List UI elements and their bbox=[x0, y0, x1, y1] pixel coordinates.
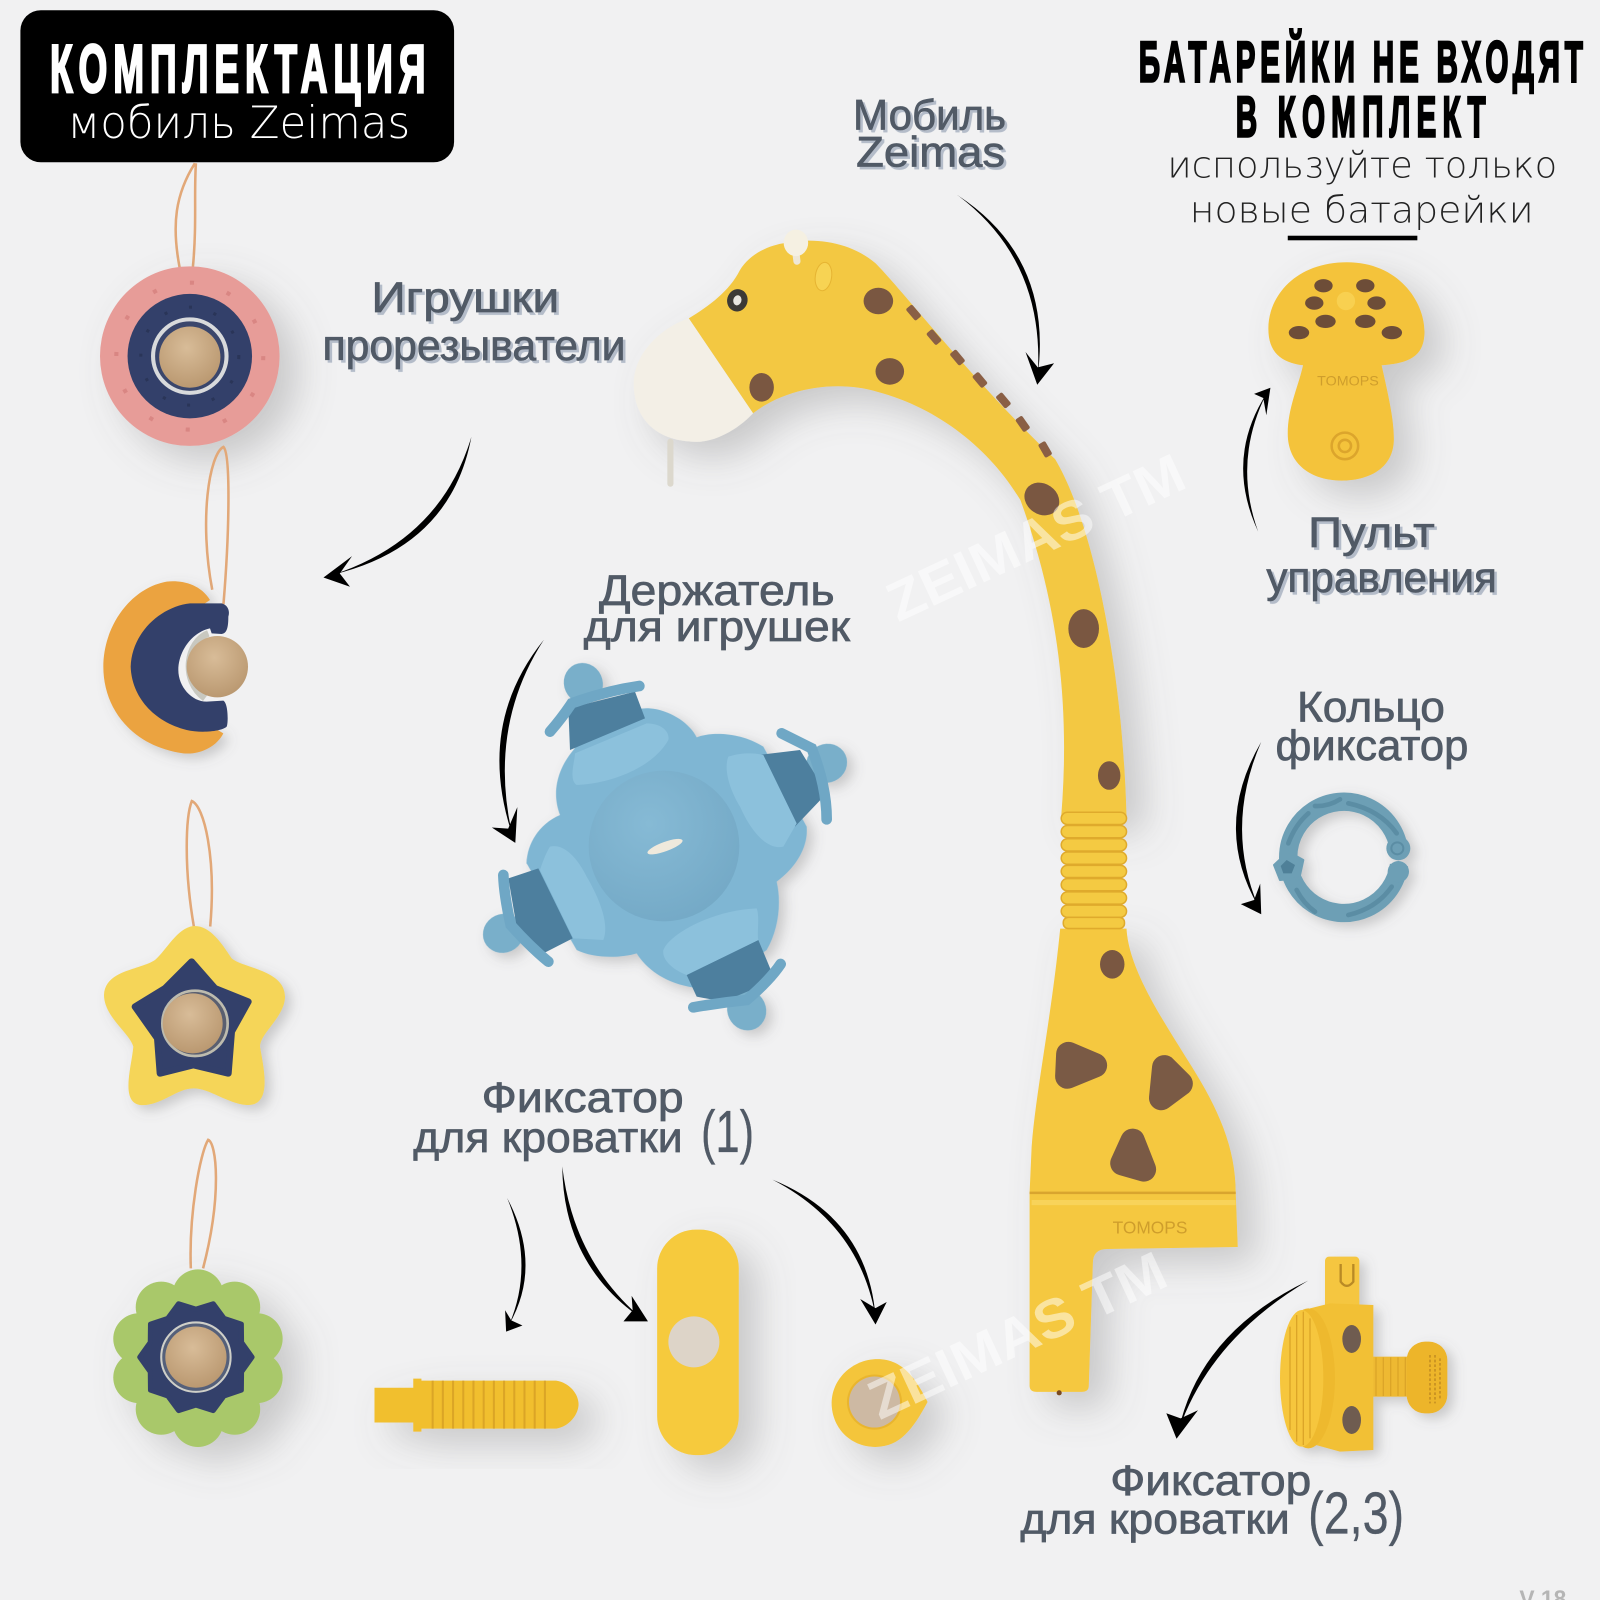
holder channels bbox=[508, 692, 827, 1002]
watermark bottom: ZEIMAS TM bbox=[858, 1239, 1176, 1431]
arrow: screw bbox=[505, 1198, 526, 1332]
blue toy holder bbox=[476, 656, 854, 1037]
label: holder bbox=[584, 567, 850, 651]
label: fixator 1: для кроватки bbox=[413, 1114, 683, 1162]
bed fixator: nut bbox=[832, 1359, 928, 1447]
battery note: новые батарейки bbox=[1190, 188, 1534, 231]
label: mobile: Мобиль bbox=[853, 92, 1006, 140]
giraffe spots bbox=[749, 288, 1181, 1169]
toy: pink teether bbox=[100, 163, 280, 446]
giraffe eye bbox=[725, 287, 750, 314]
remote buttons bbox=[1289, 279, 1402, 339]
label: ring: фиксатор bbox=[1276, 722, 1468, 770]
label: remote: управления bbox=[1266, 554, 1497, 602]
bed fixator: screw bbox=[374, 1379, 579, 1432]
battery note bbox=[1167, 144, 1557, 231]
label: fixator 2,3: для кроватки bbox=[1020, 1496, 1290, 1544]
holder flanges bbox=[503, 686, 827, 1007]
toy: green flower teether bbox=[113, 1140, 283, 1447]
holder panels bbox=[540, 723, 797, 975]
giraffe base bbox=[1030, 929, 1238, 1392]
label: ring: Кольцо bbox=[1297, 683, 1445, 731]
remote spiral bbox=[1332, 433, 1358, 459]
title heading: КОМПЛЕКТАЦИЯ bbox=[50, 31, 425, 107]
arrow: plate bbox=[562, 1166, 648, 1321]
arrow: nut bbox=[772, 1180, 887, 1324]
giraffe mobile arm bbox=[634, 230, 1238, 1395]
holder centre pin bbox=[646, 836, 684, 857]
battery heading: В КОМПЛЕКТ bbox=[1236, 85, 1486, 149]
arrow: ring bbox=[1236, 742, 1261, 914]
giraffe ear and head knob bbox=[784, 230, 834, 292]
arrow: mobile bbox=[957, 195, 1054, 385]
label: ring bbox=[1276, 683, 1468, 770]
watermark top: ZEIMAS TM bbox=[877, 441, 1194, 633]
toy: yellow star teether bbox=[104, 801, 285, 1105]
label: fixator 1: (1) bbox=[701, 1098, 754, 1165]
title subheading: мобиль Zeimas bbox=[67, 96, 410, 149]
arrow: fixator 2,3 bbox=[1166, 1281, 1308, 1439]
arrow: holder bbox=[492, 640, 544, 843]
label: fixator 1: Фиксатор bbox=[482, 1074, 684, 1122]
holder central dome bbox=[589, 771, 739, 921]
base brand mark: TOMOPS bbox=[1113, 1218, 1187, 1238]
holder body bbox=[476, 656, 854, 1037]
whisker bbox=[667, 442, 673, 484]
ring knob detail bbox=[1391, 842, 1403, 854]
label: fixator 2,3 bbox=[1020, 1457, 1404, 1547]
label: fixator 1 bbox=[413, 1074, 754, 1165]
ring slots bbox=[1288, 799, 1397, 915]
toy: orange moon teether bbox=[103, 447, 248, 754]
label: teethers bbox=[322, 274, 626, 370]
remote control bbox=[1268, 262, 1424, 481]
fixing ring bbox=[1274, 799, 1410, 915]
giraffe mane dashes bbox=[906, 304, 1053, 458]
label: mobile bbox=[853, 92, 1006, 176]
label: remote bbox=[1266, 509, 1497, 602]
corrugated neck joint bbox=[1061, 812, 1127, 929]
battery heading: БАТАРЕЙКИ НЕ ВХОДЯТ bbox=[1139, 29, 1583, 94]
label: remote: Пульт bbox=[1308, 509, 1435, 557]
label: holder: Держатель bbox=[599, 567, 835, 615]
giraffe snout bbox=[634, 318, 753, 442]
title panel bbox=[20, 10, 454, 162]
bed fixator 2,3 bbox=[1280, 1257, 1447, 1452]
bed fixator: plate bbox=[657, 1230, 739, 1455]
label: teethers: прорезыватели bbox=[322, 322, 626, 370]
fixator details bbox=[1290, 1312, 1405, 1445]
battery note: используйте только bbox=[1167, 144, 1557, 187]
label: teethers: Игрушки bbox=[371, 274, 559, 322]
battery notice bbox=[1139, 29, 1583, 240]
label: mobile: Zeimas bbox=[856, 128, 1005, 176]
fixator spots bbox=[1342, 1325, 1361, 1434]
screw thread ribs bbox=[433, 1381, 545, 1429]
label: holder: для игрушек bbox=[584, 603, 850, 651]
label: fixator 2,3: Фиксатор bbox=[1110, 1457, 1311, 1505]
arrow: teethers bbox=[323, 437, 471, 587]
arrow: remote bbox=[1243, 388, 1270, 532]
giraffe neck bbox=[689, 241, 1127, 816]
label: fixator 2,3: (2,3) bbox=[1308, 1480, 1404, 1547]
battery heading bbox=[1139, 29, 1583, 149]
remote brand: TOMOPS bbox=[1317, 374, 1379, 390]
